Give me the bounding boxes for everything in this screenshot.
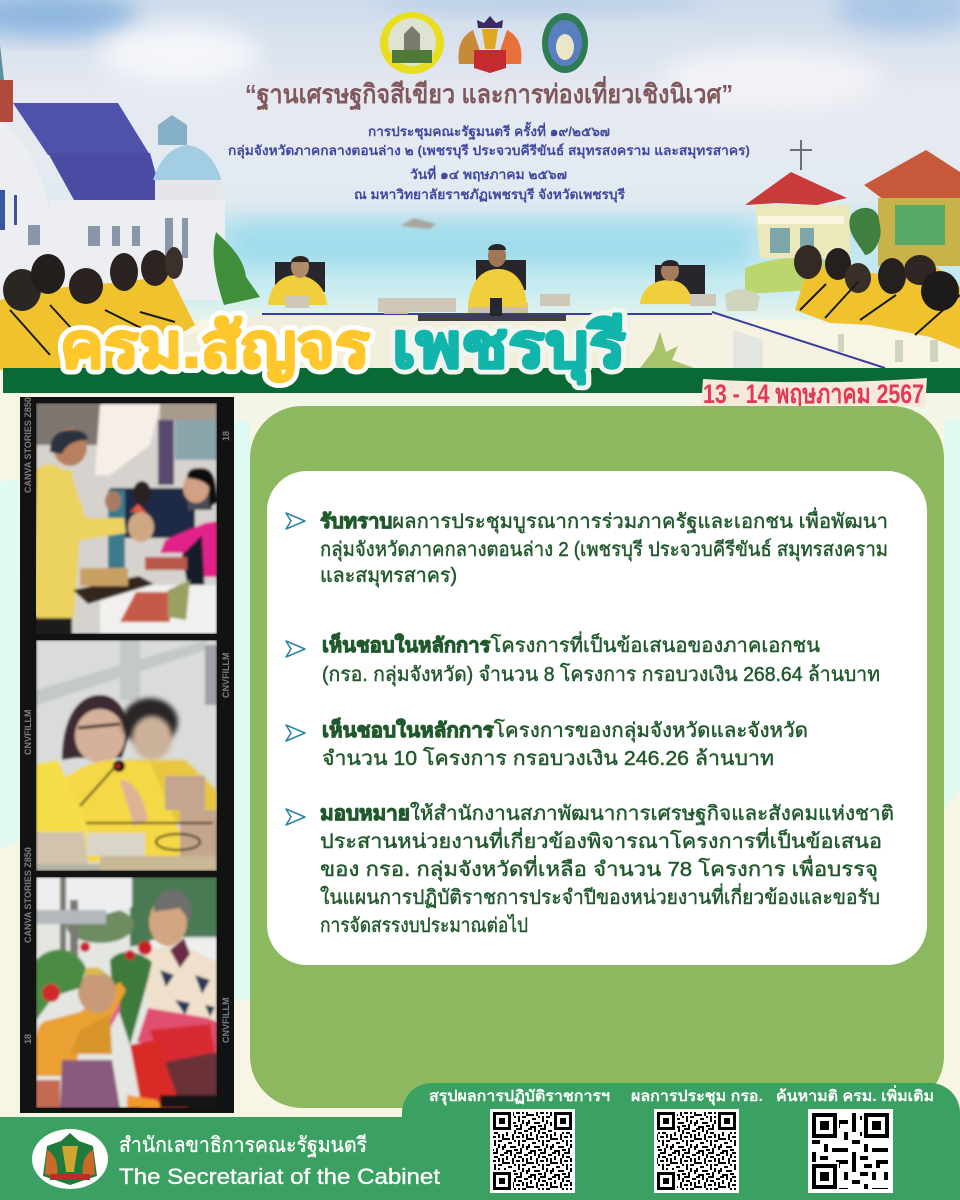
film strip labels: CNVFILLM bbox=[23, 710, 33, 755]
head-table officials bbox=[268, 244, 716, 316]
item: approved private sector projects bbox=[286, 631, 880, 687]
logos bbox=[380, 12, 588, 74]
logo: Phetchaburi province bbox=[380, 12, 444, 74]
organisation name: The Secretariat of the Cabinet bbox=[119, 1164, 440, 1189]
QR code: performance summary bbox=[490, 1109, 575, 1193]
palace illustration bbox=[0, 45, 260, 305]
item: acknowledged bbox=[286, 507, 888, 588]
logo: Rajabhat University bbox=[542, 13, 588, 73]
film strip labels: CANVA STORIES Z850 bbox=[23, 397, 33, 493]
QR code: search cabinet resolutions bbox=[808, 1109, 893, 1193]
green title band bbox=[3, 368, 960, 393]
item: approved provincial projects: จำนวน 10 โครงการ กรอบวงเงิน 246.26 ล้านบาท bbox=[322, 747, 774, 770]
photo: PM receiving a gift basket bbox=[34, 403, 217, 634]
title: ครม.สัญจร เพชรบุรี: เพชรบุรี bbox=[392, 312, 626, 384]
event details: การประชุมคณะรัฐมนตรี ครั้งที่ ๑๙/๒๕๖๗ bbox=[368, 121, 610, 141]
event details: วันที่ ๑๔ พฤษภาคม ๒๕๖๗ bbox=[410, 165, 567, 182]
title: ครม.สัญจร เพชรบุรี: ครม.สัญจร bbox=[60, 312, 370, 382]
organisation name: สำนักเลขาธิการคณะรัฐมนตรี bbox=[119, 1134, 367, 1157]
item: assigned NESDC bbox=[286, 802, 894, 937]
cabinet secretariat logo bbox=[32, 1129, 108, 1189]
item: assigned NESDC: ในแผนการปฏิบัติราชการประจำปีของหน่วยงานที่เกี่ยวข้องและขอรับ bbox=[320, 883, 880, 909]
item: assigned NESDC: ของ กรอ. กลุ่มจังหวัดที่เหลือ จำนวน 78 โครงการ เพื่อบรรจุ bbox=[320, 855, 878, 882]
item: acknowledged: และสมุทรสาคร) bbox=[320, 565, 457, 588]
item: assigned NESDC: การจัดสรรงบประมาณต่อไป bbox=[320, 914, 528, 937]
green content panel bbox=[250, 406, 944, 1108]
item: acknowledged: รับทราบผลการประชุมบูรณาการร่วมภาครัฐและเอกชน เพื่อพัฒนา bbox=[320, 507, 888, 534]
film strip labels: CANVA STORIES Z850 bbox=[23, 847, 33, 943]
header photo: cabinet meeting room bbox=[0, 0, 960, 395]
item: assigned NESDC: มอบหมายให้สำนักงานสภาพัฒนาการเศรษฐกิจและสังคมแห่งชาติ bbox=[320, 802, 894, 825]
sky and sea backdrop bbox=[0, 0, 960, 320]
item: approved provincial projects: เห็นชอบในหลักการโครงการของกลุ่มจังหวัดและจังหวัด bbox=[322, 717, 808, 743]
film strip labels: CNVFILLM bbox=[221, 652, 231, 698]
film strip photos bbox=[20, 397, 234, 1113]
photo: PM receiving roses at a parade bbox=[36, 877, 217, 1109]
film strip labels bbox=[23, 397, 231, 1044]
film strip labels: 18 bbox=[23, 1034, 33, 1044]
meeting table bbox=[138, 303, 886, 368]
arrow icon bbox=[286, 725, 305, 741]
item: assigned NESDC: ประสานหน่วยงานที่เกี่ยวข้องพิจารณาโครงการที่เป็นข้อเสนอ bbox=[320, 827, 882, 853]
event heading: “ฐานเศรษฐกิจสีเขียว และการท่องเที่ยวเชิงนิเวศ” bbox=[245, 75, 733, 112]
arrow icon bbox=[286, 641, 305, 657]
footer bar bbox=[0, 1083, 960, 1200]
white text card bbox=[267, 471, 927, 965]
film strip labels: 18 bbox=[221, 431, 231, 441]
title: ครม.สัญจร เพชรบุรี bbox=[60, 312, 626, 384]
logo: cabinet mobile meeting crest bbox=[459, 16, 521, 73]
item: acknowledged: กลุ่มจังหวัดภาคกลางตอนล่าง 2 (เพชรบุรี ประจวบคีรีขันธ์ สมุทรสงคราม bbox=[320, 538, 888, 562]
QR captions: ผลการประชุม กรอ. bbox=[631, 1088, 763, 1106]
item: approved private sector projects: เห็นชอบในหลักการโครงการที่เป็นข้อเสนอของภาคเอกชน bbox=[322, 631, 820, 657]
arrow icon bbox=[286, 513, 305, 529]
arrow icon bbox=[286, 809, 305, 825]
right row of officials bbox=[725, 245, 960, 362]
QR captions: ค้นหามติ ครม. เพิ่มเติม bbox=[776, 1085, 934, 1105]
QR captions bbox=[429, 1085, 934, 1106]
organisation name bbox=[119, 1134, 440, 1189]
film strip labels: CNVFILLM bbox=[221, 998, 231, 1043]
beach house illustration bbox=[745, 140, 960, 294]
event details: ณ มหาวิทยาลัยราชภัฏเพชรบุรี จังหวัดเพชรบุรี bbox=[354, 187, 625, 203]
title: ครม.สัญจร เพชรบุรี: เพชรบุรี bbox=[392, 312, 626, 384]
event details bbox=[228, 121, 750, 203]
title: ครม.สัญจร เพชรบุรี: ครม.สัญจร bbox=[60, 312, 370, 382]
QR captions: สรุปผลการปฏิบัติราชการฯ bbox=[429, 1087, 610, 1106]
left row of officials bbox=[0, 247, 195, 370]
event details: กลุ่มจังหวัดภาคกลางตอนล่าง ๒ (เพชรบุรี ประจวบคีรีขันธ์ สมุทรสงคราม และสมุทรสาคร) bbox=[228, 143, 750, 159]
photo: official speaking at a microphone bbox=[36, 640, 217, 871]
item: approved provincial projects bbox=[286, 717, 808, 770]
item: approved private sector projects: (กรอ. กลุ่มจังหวัด) จำนวน 8 โครงการ กรอบวงเงิน 268.64 ล้านบาท bbox=[322, 663, 880, 687]
QR code: meeting results bbox=[654, 1109, 739, 1193]
